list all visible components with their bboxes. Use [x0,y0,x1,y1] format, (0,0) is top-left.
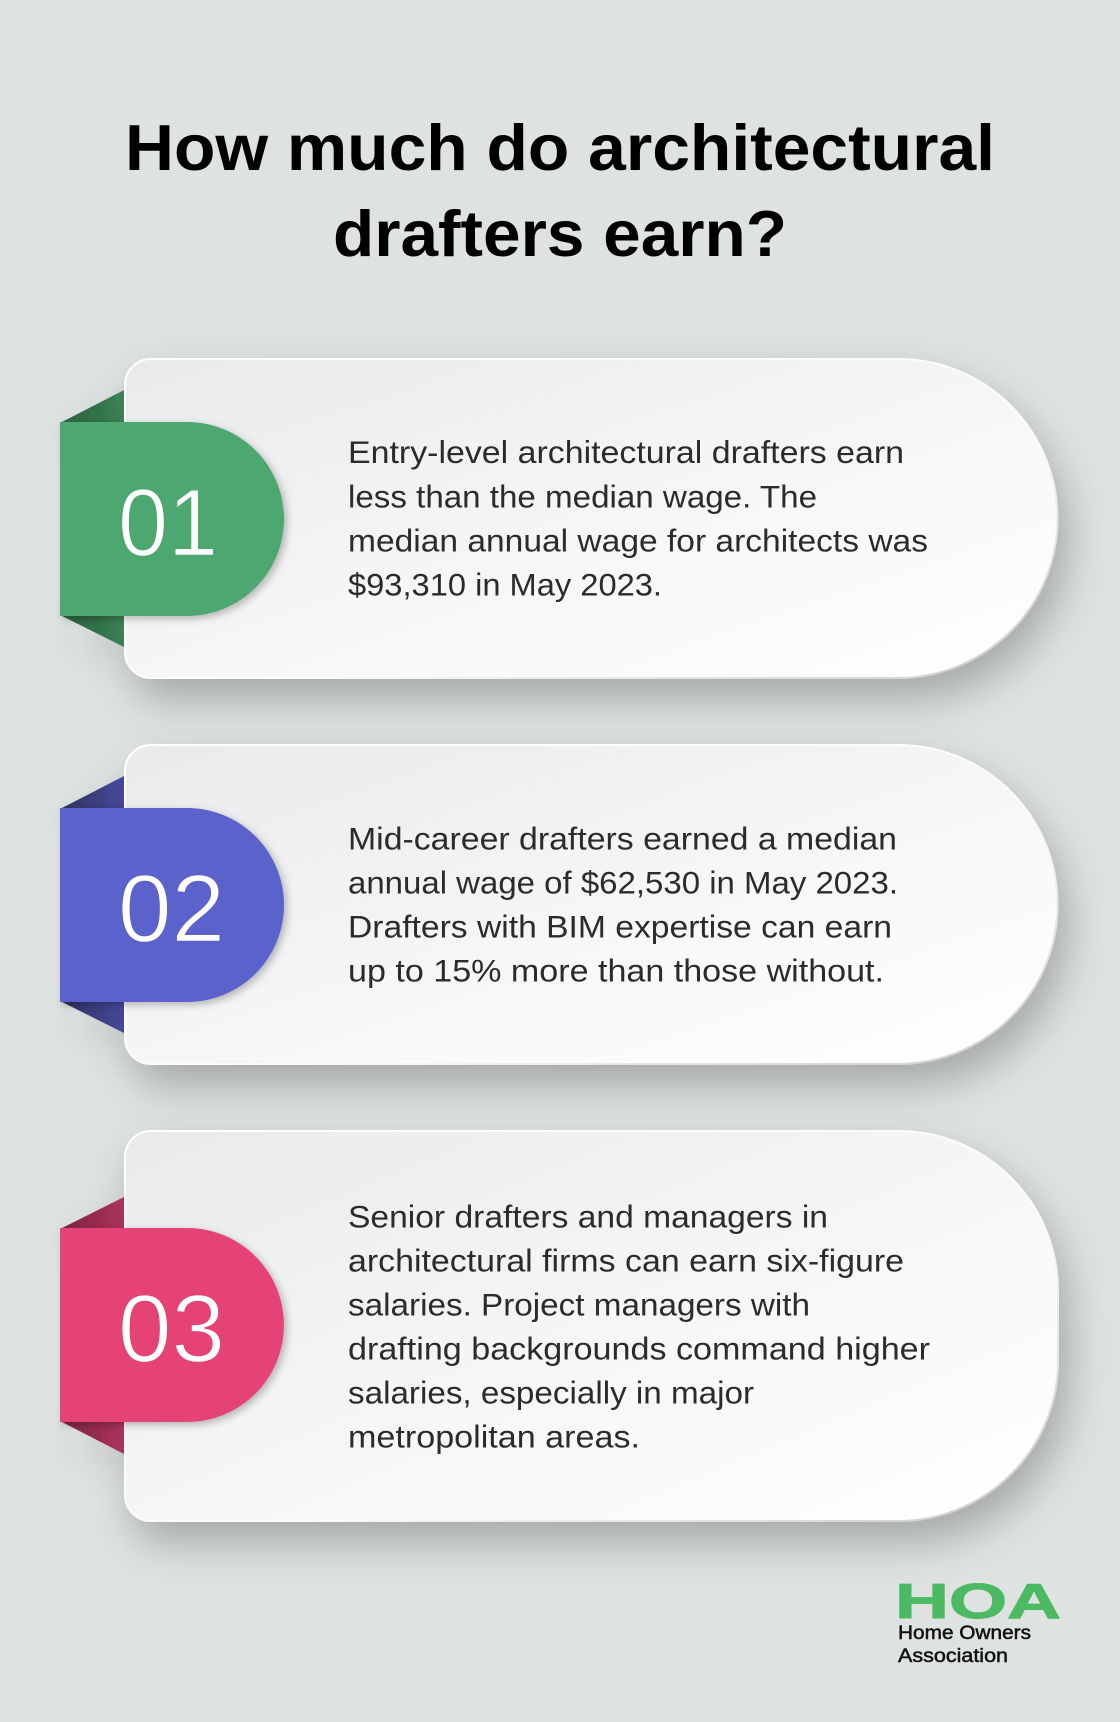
logo: HOA Home Owners Association: HOA [895,1575,1061,1629]
text: step 02: Drafters with BIM expertise can earn [348,908,892,944]
text: step 03: metropolitan areas. [348,1418,640,1454]
number badge: 03: 03 [118,1276,225,1382]
number badge: 03 [60,1228,284,1422]
text: step 03: salaries. Project managers with [348,1286,810,1322]
number badge: 01 [60,422,284,616]
ribbon folds: step 01 [60,389,126,648]
ribbon folds: step 02 [60,775,126,1034]
panel: step 02 [60,745,1058,1064]
text: step 03: Senior drafters and managers in [348,1198,828,1234]
text: step 02 [348,820,898,988]
panel: step 01 [60,359,1057,678]
text: step 01: less than the median wage. The [348,478,817,514]
text: step 01: median annual wage for architects was [348,522,928,558]
text: step 02: annual wage of $62,530 in May 2023. [348,864,898,900]
ribbon folds: step 03 [60,1196,126,1455]
number badge: 02 [60,808,284,1002]
title: How much do architectural [125,111,995,184]
logo: HOA Home Owners Association: Home Owners [898,1622,1031,1644]
text: step 03: architectural firms can earn six-figure [348,1242,904,1278]
card: step 01 [125,359,1057,678]
panel: step 03 [60,1131,1058,1521]
logo: HOA Home Owners Association: Association [898,1645,1008,1667]
card: step 03 [125,1131,1058,1521]
text: step 02: up to 15% more than those without. [348,952,884,988]
text: step 01: $93,310 in May 2023. [348,566,662,602]
text: step 03: drafting backgrounds command higher [348,1330,930,1366]
logo: HOA Home Owners Association [895,1575,1061,1667]
text: step 02: Mid-career drafters earned a median [348,820,897,856]
text: step 03: salaries, especially in major [348,1374,754,1410]
text: step 03 [348,1198,930,1454]
card: step 02 [125,745,1058,1064]
title: drafters earn? [333,197,787,270]
number badge: 01: 01 [118,470,218,576]
title [125,111,995,270]
text: step 01 [348,434,928,602]
number badge: 02: 02 [118,856,225,962]
text: step 01: Entry-level architectural drafters earn [348,434,904,470]
